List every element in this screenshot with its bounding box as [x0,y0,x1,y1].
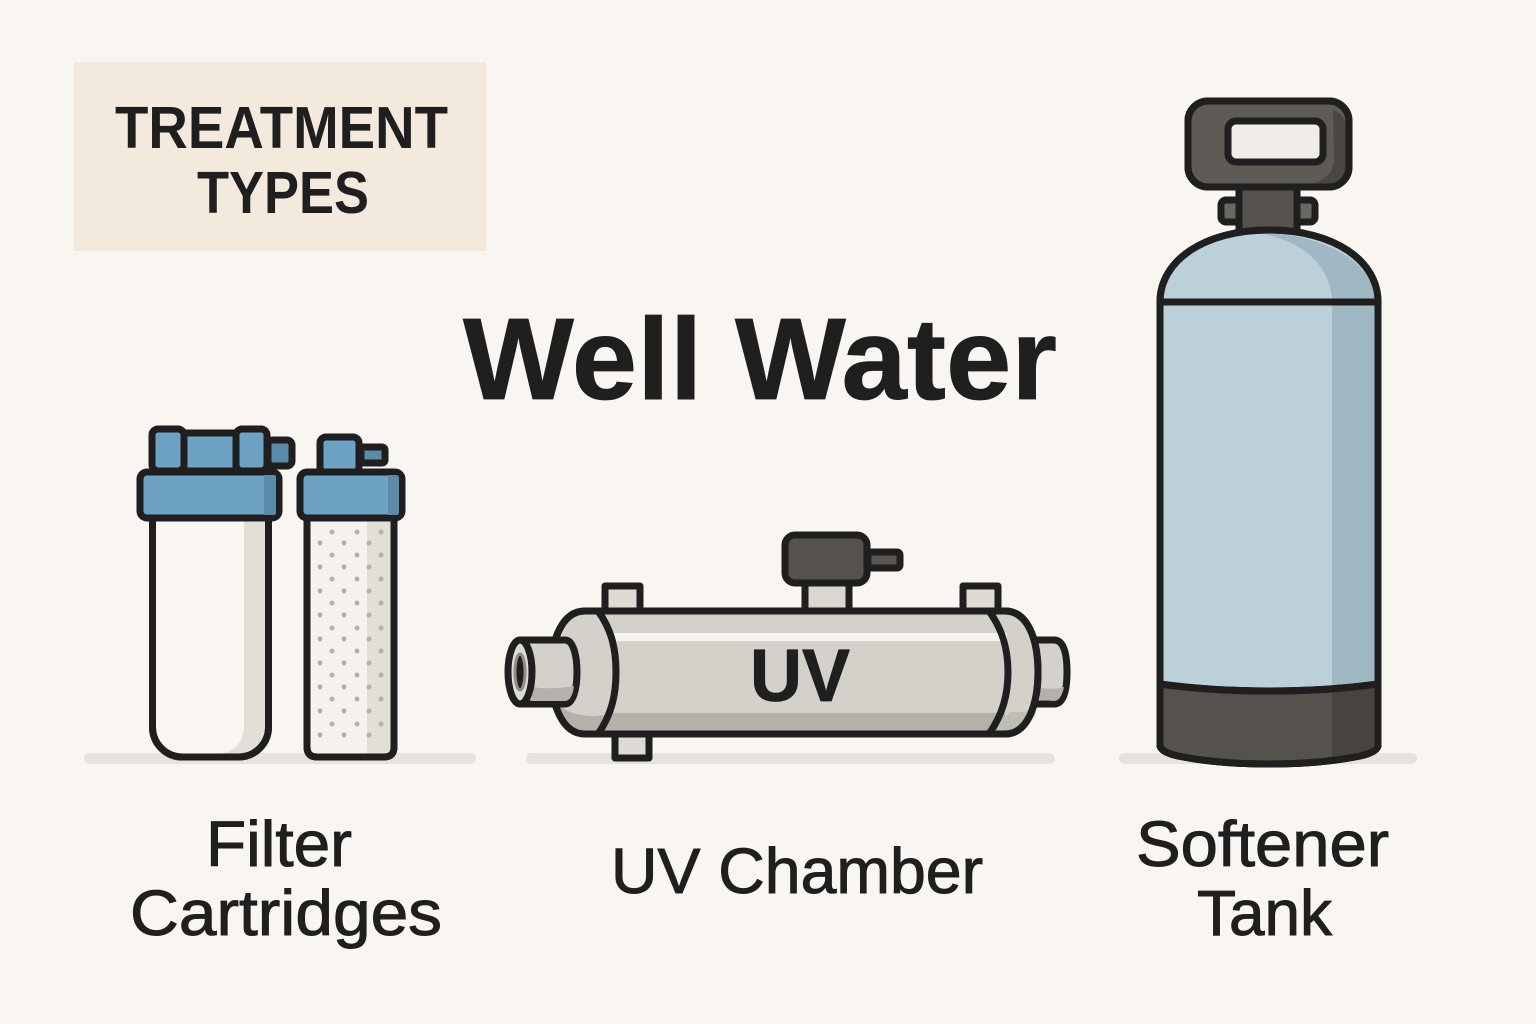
control valve head [1188,101,1349,187]
badge heading: TREATMENT [115,95,448,161]
label: filter cartridges: Filter [206,808,352,880]
ground shadow: UV chamber [526,753,1055,764]
icon: softener tank [1160,101,1378,764]
outlet pipe [1030,640,1067,704]
ground shadow: softener tank [1119,753,1417,764]
display window [1228,121,1323,162]
control head [785,535,900,583]
dark base [1160,684,1378,764]
ground shadow: filters [84,753,476,764]
side clips [1221,200,1315,222]
label: softener tank: Tank [1197,877,1333,949]
neck [1239,185,1297,233]
inlet pipe [508,640,577,704]
UV tube label: UV [750,634,850,717]
label: softener tank: Softener [1136,808,1389,880]
panel: treatment types badge [74,62,486,251]
tank body [1160,230,1378,764]
icon: filter cartridges [140,429,402,757]
dotted media cartridge [300,437,402,757]
title: Well Water [463,294,1057,424]
icon: UV chamber [508,535,1067,758]
mounting tabs and neck [605,582,998,758]
label: filter cartridges: Cartridges [130,877,442,949]
main tube [551,611,1038,734]
large clear cartridge [140,429,292,757]
label: UV chamber: UV Chamber [611,835,983,907]
badge heading: TYPES [197,160,369,226]
